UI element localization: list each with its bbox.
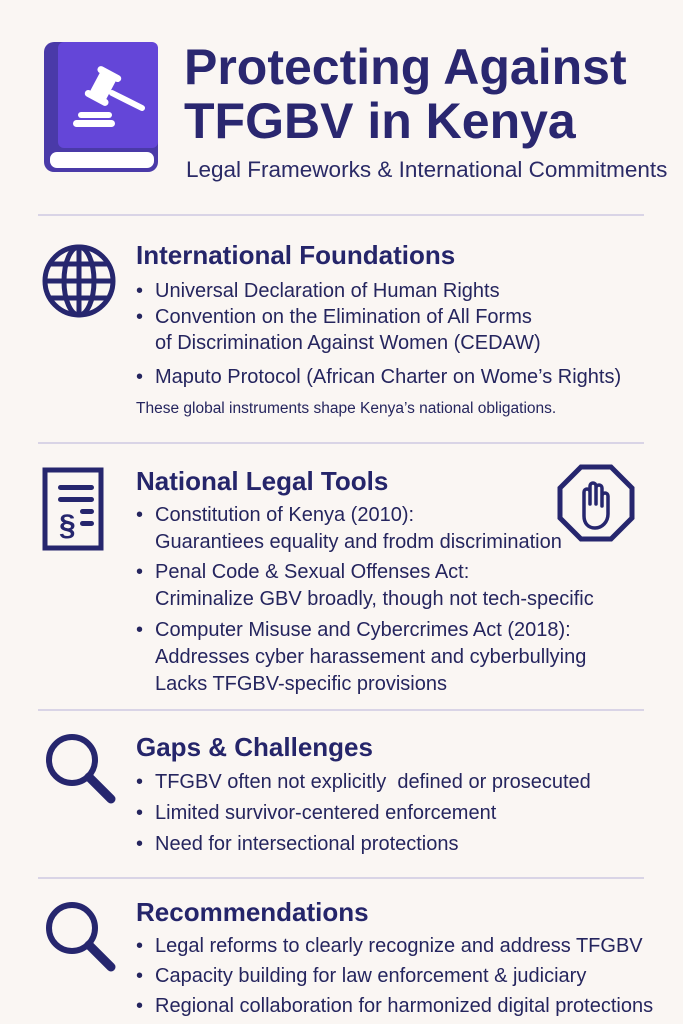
bullets: • <box>136 771 143 793</box>
section: recommendations <box>136 897 653 1017</box>
icon: globe <box>42 244 116 318</box>
bullets: Convention on the Elimination of All Forms <box>155 306 532 328</box>
bullets <box>136 280 621 388</box>
icon: law book with gavel <box>44 42 158 172</box>
bullets <box>136 771 591 855</box>
bullets: • <box>136 619 143 641</box>
section: international foundations <box>136 240 621 417</box>
heading: Gaps & Challenges <box>136 732 373 762</box>
bullets: Regional collaboration for harmonized digital protections <box>155 995 653 1017</box>
bullets: • <box>136 833 143 855</box>
bullets <box>136 504 594 695</box>
bullets: • <box>136 935 143 957</box>
icon: legal document: § <box>59 509 76 542</box>
bullets: Limited survivor-centered enforcement <box>155 802 496 824</box>
icon: magnifier <box>46 902 116 972</box>
icon: magnifier <box>46 734 116 804</box>
bullets: Constitution of Kenya (2010): <box>155 504 414 526</box>
bullets: Maputo Protocol (African Charter on Wome’s Rights) <box>155 366 621 388</box>
bullets: of Discrimination Against Women (CEDAW) <box>155 332 541 354</box>
bullets: TFGBV often not explicitly defined or prosecuted <box>155 771 591 793</box>
bullets: • <box>136 965 143 987</box>
bullets <box>136 935 653 1017</box>
bullets: Legal reforms to clearly recognize and address TFGBV <box>155 935 643 957</box>
bullets: Addresses cyber harassement and cyberbullying <box>155 646 586 668</box>
bullets: • <box>136 306 143 328</box>
bullets: Penal Code & Sexual Offenses Act: <box>155 561 469 583</box>
section: gaps & challenges <box>136 732 591 855</box>
title: TFGBV in Kenya <box>184 93 576 149</box>
bullets: Need for intersectional protections <box>155 833 458 855</box>
bullets: Criminalize GBV broadly, though not tech-specific <box>155 588 594 610</box>
bullets: • <box>136 995 143 1017</box>
note: These global instruments shape Kenya’s national obligations. <box>136 400 556 417</box>
icon: legal document <box>42 468 104 550</box>
heading: National Legal Tools <box>136 466 388 496</box>
heading: Recommendations <box>136 897 369 927</box>
heading: International Foundations <box>136 240 455 270</box>
bullets: Guarantiees equality and frodm discrimination <box>155 531 562 553</box>
section: national legal tools <box>136 466 594 695</box>
bullets: Universal Declaration of Human Rights <box>155 280 500 302</box>
title: Protecting Against <box>184 39 627 95</box>
bullets: • <box>136 280 143 302</box>
bullets: • <box>136 802 143 824</box>
title <box>184 39 627 149</box>
subtitle: Legal Frameworks & International Commitments <box>186 157 667 182</box>
bullets: Capacity building for law enforcement & judiciary <box>155 965 586 987</box>
bullets: Computer Misuse and Cybercrimes Act (2018): <box>155 619 571 641</box>
bullets: Lacks TFGBV-specific provisions <box>155 673 447 695</box>
bullets: • <box>136 504 143 526</box>
icon: stop hand <box>558 464 634 542</box>
bullets: • <box>136 561 143 583</box>
bullets: • <box>136 366 143 388</box>
